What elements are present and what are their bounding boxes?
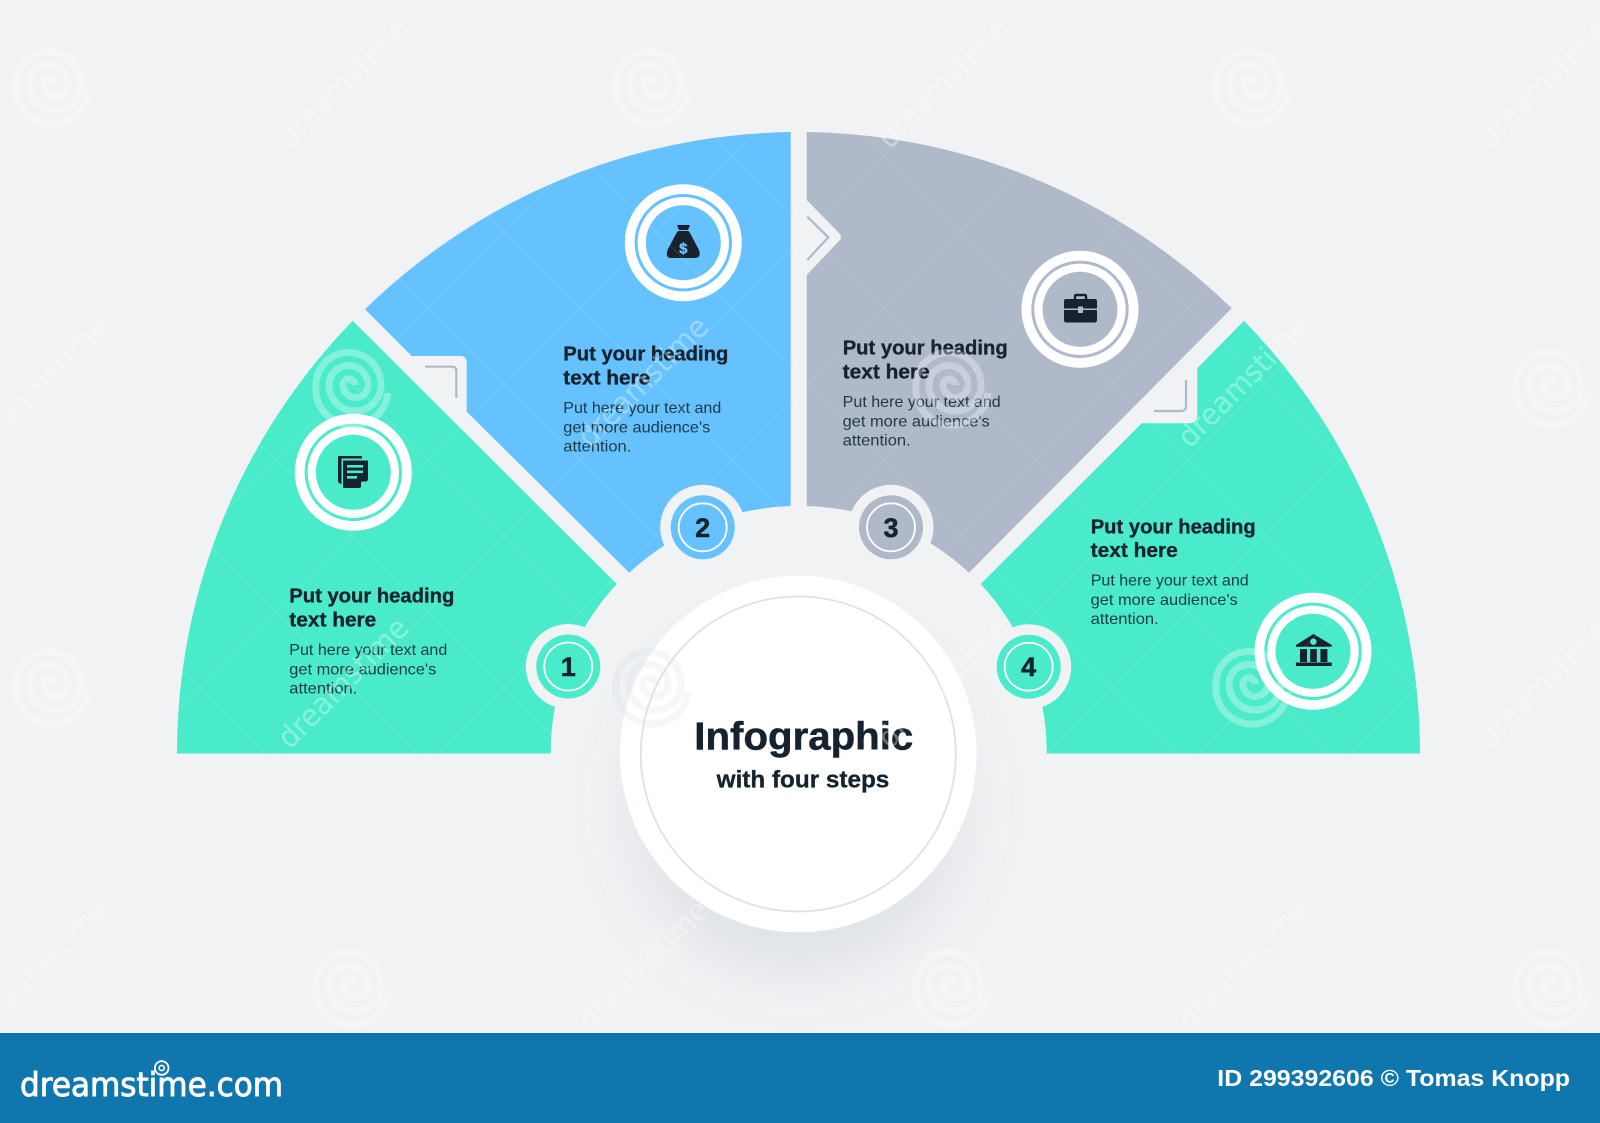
step 1 number badge: 1: [561, 652, 576, 682]
footer image credit: ID 299392606 © Tomas Knopp: [1217, 1065, 1570, 1091]
icon: briefcase in white ring: [1022, 251, 1138, 368]
panel: step 1 wedge: [177, 321, 617, 754]
watermark wordmarks: dreamstime: [871, 611, 1016, 756]
text block: step 1: [289, 585, 454, 697]
text block: step 4: [1091, 515, 1256, 628]
watermark wordmarks: dreamstime: [571, 310, 716, 455]
text block: step 3: attention.: [843, 432, 911, 449]
step 2 number badge: [660, 485, 745, 570]
text block: step 2: [563, 343, 728, 455]
arrow: step 3 to step 4: [1154, 380, 1186, 411]
footer logo text: dreamstime.com: [20, 1065, 283, 1104]
panel: step 2 wedge: [365, 132, 791, 573]
text block: step 2: get more audience's: [563, 419, 710, 436]
central circle with title: [620, 576, 977, 932]
step 1 number badge: [526, 624, 611, 709]
subtitle: with four steps: [716, 766, 889, 793]
step 4 number badge: 4: [1021, 652, 1036, 682]
text block: step 4: text here: [1091, 539, 1178, 562]
icon: document in white ring: [295, 414, 412, 531]
text block: step 2: Put here your text and: [563, 400, 721, 417]
arrow: step 2 to step 3: [807, 217, 828, 260]
text block: step 1: text here: [289, 608, 376, 631]
panel: step 3 wedge: [807, 132, 1232, 573]
icon: money bag in white ring: $: [679, 240, 688, 257]
text block: step 3: text here: [843, 360, 930, 383]
step 3 number badge: [848, 485, 934, 570]
text block: step 3: Put here your text and: [843, 394, 1001, 411]
watermark wordmarks: dreamstime: [271, 611, 416, 756]
text block: step 1: Put your heading: [289, 585, 454, 608]
watermark lattice lines: [177, 132, 1420, 754]
text block: step 3: Put your heading: [843, 337, 1008, 360]
text block: step 2: text here: [563, 366, 650, 389]
icon: bank in white ring: [1254, 593, 1372, 710]
text block: step 1: attention.: [289, 680, 357, 697]
text block: step 1: get more audience's: [289, 661, 436, 678]
step 3 number badge: 3: [883, 513, 899, 543]
watermark swirl over central circle: [616, 652, 688, 724]
text block: step 2: Put your heading: [563, 343, 728, 366]
central circle shadow: [633, 640, 963, 970]
text block: step 1: Put here your text and: [289, 642, 447, 659]
watermark wordmarks: dreamstime: [871, 11, 1016, 156]
text block: step 2: attention.: [563, 438, 631, 455]
text block: step 4: get more audience's: [1091, 592, 1238, 609]
footer logo swirl: [155, 1061, 168, 1075]
panel: step 4 wedge: [981, 321, 1420, 754]
watermark wordmarks: dreamstime: [1171, 310, 1316, 455]
title: Infographic: [694, 715, 913, 758]
step 2 number badge: 2: [695, 513, 710, 543]
watermark wordmarks: dreamstime: [1171, 893, 1316, 1038]
step 4 number badge: [986, 624, 1071, 709]
text block: step 4: Put your heading: [1091, 515, 1256, 538]
footer bar: [0, 1033, 1600, 1123]
text block: step 4: attention.: [1091, 611, 1159, 628]
text block: step 3: get more audience's: [843, 413, 990, 430]
text block: step 4: Put here your text and: [1091, 573, 1249, 590]
text block: step 3: [843, 337, 1008, 449]
icon: money bag in white ring: [625, 184, 742, 301]
arrow: step 1 to step 2: [425, 367, 456, 398]
watermark wordmarks: dreamstime: [571, 893, 716, 1038]
watermark wordmarks: dreamstime: [271, 11, 416, 156]
